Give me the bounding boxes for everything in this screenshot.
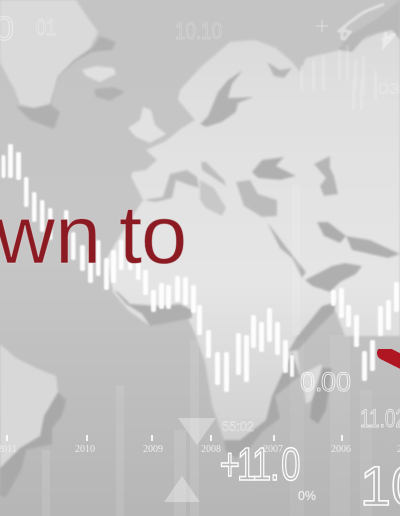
triangle: up [164, 476, 200, 502]
land: Madagascar [302, 364, 322, 404]
faded candlesticks top right [300, 45, 377, 110]
shadow: Gulf of Guinea [114, 290, 192, 326]
sea: White Sea [267, 62, 292, 78]
land: South America [0, 344, 58, 470]
shadow: South America [0, 392, 66, 497]
sea: Black Sea [252, 157, 296, 180]
number 03 faded right: 03 [378, 81, 400, 98]
shadow: Iceland [94, 87, 125, 101]
shadow: Madagascar [310, 368, 332, 424]
number 10.10 faded: 10.10 [175, 18, 222, 45]
candlestick chart [2, 144, 399, 392]
sea: Red Sea [267, 222, 306, 278]
sea: Mediterranean west [143, 170, 199, 202]
bright scribble at top right [338, 4, 395, 46]
sea: eastern Mediterranean [200, 180, 226, 216]
sea: Caspian [314, 156, 338, 196]
land: British Isles [128, 107, 166, 143]
number 01 faded: 01 [36, 15, 56, 40]
sea: Italy and Adriatic [201, 162, 226, 186]
shadow: Arabia south coast [305, 263, 362, 292]
number 0.00: 0.00 [300, 367, 351, 397]
red arrow [384, 353, 400, 366]
label 2006: 2006 [331, 444, 351, 455]
land: Iceland [82, 66, 116, 82]
shadow: southeast Africa [224, 352, 300, 458]
sea: Persian Gulf [317, 222, 346, 243]
title text: wnto [0, 188, 187, 281]
number 0%: 0% [298, 488, 316, 503]
sea: Arabian coast [346, 236, 400, 258]
sea: Baltic [200, 70, 254, 127]
year axis labels [0, 444, 400, 455]
label 2007: 2007 [263, 444, 283, 455]
sea: Aegean and Turkey [236, 180, 277, 217]
plus mark [316, 20, 328, 32]
shadow: Greenland [16, 36, 116, 129]
land: Eurasia and Africa [107, 22, 400, 440]
label 2010: 2010 [75, 444, 95, 455]
shadow: Siberia coast [338, 0, 400, 52]
label 2008: 2008 [201, 444, 221, 455]
land: Greenland [0, 0, 98, 108]
faint vertical chart bars [42, 185, 372, 516]
year axis ticks [6, 435, 343, 441]
hourglass triangles [164, 418, 216, 502]
number +11.0: +11.0 [220, 438, 300, 490]
triangle: down [178, 418, 216, 445]
shadow: East Africa [288, 302, 336, 352]
number 55:02: 55:02 [222, 418, 254, 434]
label 2009: 2009 [143, 444, 163, 455]
